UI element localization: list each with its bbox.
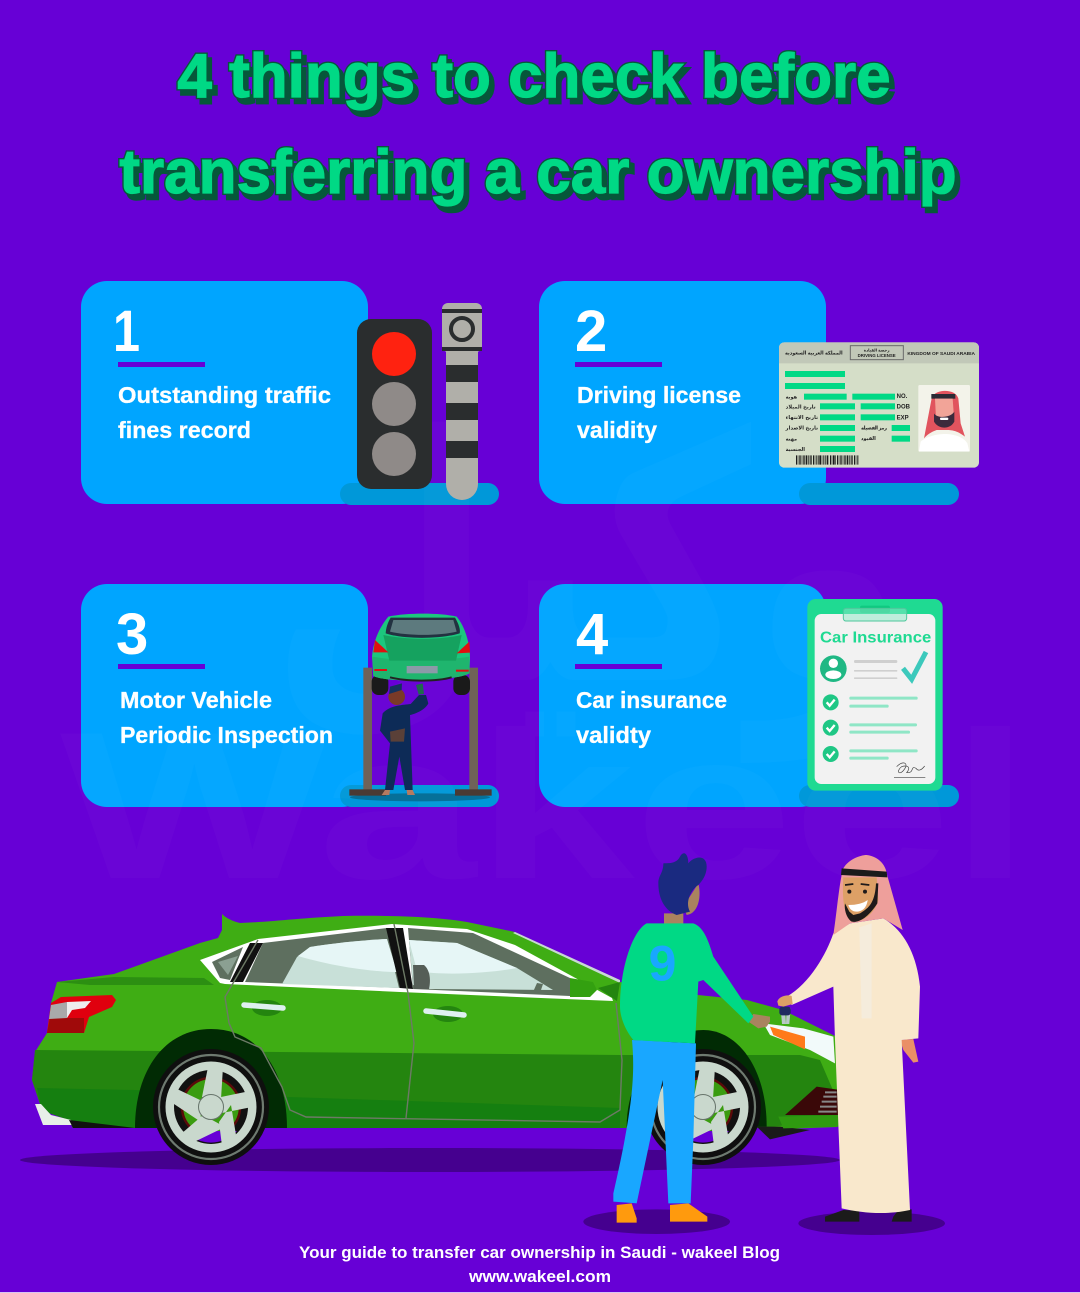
- panel: card 4: [539, 584, 826, 807]
- front wheel arch: [627, 1030, 767, 1127]
- icon: driving license card: تاريخ الانتهاء: [786, 415, 818, 421]
- card 4 text: validty: [576, 722, 651, 748]
- footer text: www.wakeel.com: [468, 1267, 611, 1286]
- person: customer from behind: [583, 853, 770, 1234]
- icon: driving license card: EXP: [897, 415, 909, 421]
- card 1 text: 1: [113, 299, 140, 364]
- icon: driving license card: رخصة القيادة: [864, 347, 890, 352]
- title: transferring a car ownership: [119, 138, 957, 207]
- panel: card 3: [81, 584, 368, 807]
- rear wheel: [153, 1049, 269, 1165]
- icon: traffic light and post: [357, 303, 482, 500]
- card 3 text: Motor Vehicle: [120, 687, 272, 713]
- footer text: Your guide to transfer car ownership in Saudi - wakeel Blog: [299, 1243, 780, 1262]
- icon: driving license card: المملكة العربية السعودية: [785, 351, 843, 357]
- icon: car insurance clipboard: Car Insurance: [820, 629, 932, 646]
- icon: driving license card: تاريخ الميلاد: [786, 404, 816, 410]
- title: 4 things to check before: [181, 47, 895, 116]
- card 2 base pill: [799, 483, 959, 505]
- silver roof edge: [513, 932, 620, 983]
- card 4 base pill: [799, 785, 959, 807]
- pillars: [386, 928, 413, 989]
- wing mirror: [570, 978, 597, 997]
- card 2 text: Driving license: [577, 382, 741, 408]
- door handles: [244, 1000, 464, 1022]
- card 2 text: validity: [577, 417, 657, 443]
- title: 4 things to check before: [177, 42, 891, 111]
- icon: driving license card: KINGDOM OF SAUDI ARABIA: [907, 351, 975, 357]
- illustration: green car: [32, 914, 840, 1165]
- icon: driving license card: رمز الفصيلة: [861, 425, 887, 431]
- rear wheel arch: [135, 1029, 287, 1128]
- title: transferring a car ownership: [123, 143, 961, 212]
- title: 4 things to check before: [177, 42, 891, 111]
- card 3 text: Periodic Inspection: [120, 722, 333, 748]
- icon: driving license card: [779, 342, 979, 468]
- sill band: [37, 1088, 620, 1128]
- icon: car on lift with mechanic: [349, 614, 492, 801]
- front of car: [627, 1023, 840, 1139]
- headlight: [763, 1023, 835, 1063]
- icon: driving license card: NO.: [897, 394, 908, 400]
- front wheel: [645, 1049, 761, 1165]
- rear window: [245, 928, 402, 988]
- card 1 base pill: [340, 483, 499, 505]
- card 4 text: Car insurance: [576, 687, 727, 713]
- icon: driving license card: مهنة: [786, 436, 797, 442]
- card 3 text: 3: [116, 602, 148, 667]
- car body: [32, 914, 837, 1138]
- card 4 text: [575, 602, 727, 748]
- card 3 base pill: [340, 785, 499, 807]
- icon: driving license card: DOB: [897, 405, 911, 411]
- icon: driving license card: الجنسية: [786, 447, 805, 453]
- person: seller in thobe with keys: [777, 855, 945, 1235]
- icon: driving license card: هوية: [786, 394, 798, 400]
- front window: [408, 928, 570, 996]
- icon: driving license card: تاريخ الاصدار: [785, 426, 818, 432]
- watermark: Wakeel: [60, 688, 1030, 923]
- panel: card 1: [81, 281, 368, 504]
- rear bumper trim: [35, 1104, 73, 1125]
- card 2 text: 2: [575, 299, 607, 364]
- person: customer from behind: 9: [649, 936, 676, 992]
- window frame: [200, 924, 613, 1001]
- rear quarter glass: [212, 947, 243, 980]
- ground shadow: car: [20, 1148, 840, 1172]
- card 4 text: 4: [576, 602, 608, 667]
- title: transferring a car ownership: [119, 138, 957, 207]
- lower body band: [32, 1050, 837, 1128]
- icon: driving license card: DRIVING LICENSE: [858, 353, 896, 358]
- card 1 text: fines record: [118, 417, 251, 443]
- watermark: [60, 373, 1030, 923]
- door seams: [225, 924, 622, 1122]
- title: [119, 42, 961, 212]
- footer text: [299, 1243, 780, 1286]
- tail light: [47, 995, 116, 1033]
- card 1 text: [113, 299, 331, 443]
- icon: driving license card: القيود: [861, 436, 876, 442]
- icon: car insurance clipboard: [807, 599, 943, 791]
- card 2 text: [575, 299, 741, 443]
- card 3 text: [116, 602, 333, 748]
- panel: card 2: [539, 281, 826, 504]
- deck line: [57, 977, 214, 985]
- card 1 text: Outstanding traffic: [118, 382, 331, 408]
